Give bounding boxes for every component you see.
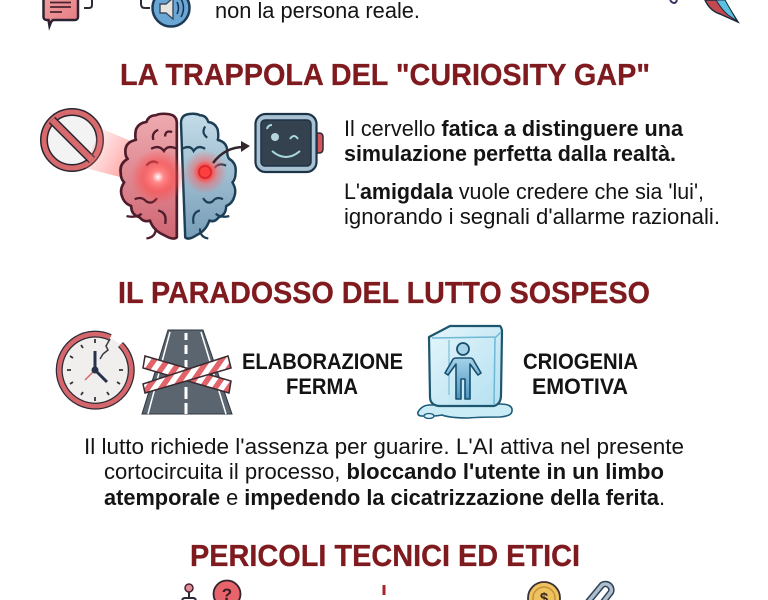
label: elaborazione ferma: FERMA — [286, 374, 358, 399]
heading: curiosity gap: LA TRAPPOLA DEL "CURIOSITY GAP" — [120, 57, 650, 92]
text block: grief explanation — [84, 434, 684, 510]
barrier 2 — [143, 356, 231, 393]
icon: chat bubble — [44, 0, 92, 26]
heading: pericoli: PERICOLI TECNICI ED ETICI — [190, 538, 580, 573]
icon: blocked road — [142, 330, 232, 414]
barrier 1 — [143, 356, 231, 393]
label: elaborazione ferma: ELABORAZIONE — [242, 349, 403, 374]
red beam — [85, 128, 158, 177]
text block: brain explanation: ignorando i segnali d'allarme razionali. — [344, 204, 720, 229]
left hemisphere — [121, 114, 177, 239]
text block: grief explanation: atemporale e impedendo la cicatrizzazione della ferita. — [104, 485, 665, 510]
icon: question mark — [214, 580, 240, 600]
text block: brain explanation — [344, 116, 720, 229]
label: criogenia emotiva: EMOTIVA — [532, 374, 628, 399]
text block: grief explanation: Il lutto richiede l'assenza per guarire. L'AI attiva nel presente — [84, 434, 684, 459]
icon: exclamation — [382, 585, 386, 595]
label: elaborazione ferma — [242, 349, 403, 399]
label: criogenia emotiva — [523, 349, 638, 399]
heading: lutto sospeso: IL PARADOSSO DEL LUTTO SOSPESO — [118, 275, 650, 310]
icon: broken clock — [59, 334, 131, 406]
icon: pin — [182, 584, 196, 600]
icon: brain — [121, 114, 236, 239]
text block: brain explanation: L'amigdala vuole credere che sia 'lui', — [344, 179, 704, 204]
icon: chain link — [588, 584, 611, 600]
left hotspot — [130, 149, 186, 205]
right hemisphere — [181, 114, 236, 239]
icon: robot face — [256, 114, 323, 172]
icon: feather — [670, 0, 738, 22]
icon: person in ice — [418, 326, 512, 418]
right hotspot — [183, 150, 227, 194]
icon: coin — [528, 582, 560, 600]
icon: prohibition sign — [44, 112, 100, 168]
icon: speaker — [141, 0, 190, 26]
label: criogenia emotiva: CRIOGENIA — [523, 349, 638, 374]
text block: brain explanation: simulazione perfetta dalla realtà. — [344, 141, 676, 166]
person — [445, 343, 481, 399]
arrow: brain to robot — [213, 147, 244, 163]
text block: grief explanation: cortocircuita il processo, bloccando l'utente in un limbo — [104, 459, 664, 484]
text block: brain explanation: Il cervello fatica a distinguere una — [344, 116, 683, 141]
